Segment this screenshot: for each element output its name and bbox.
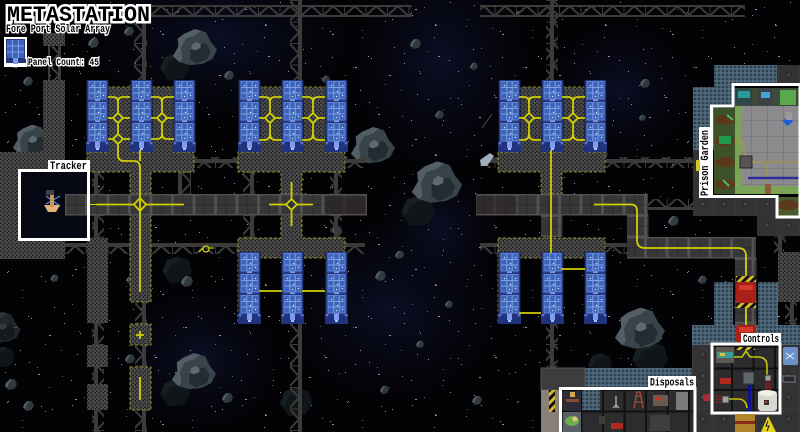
subtitle: Fore Port Solar Array <box>6 24 110 36</box>
door hazard on truss <box>696 160 700 171</box>
array 1 solar panels <box>86 80 196 152</box>
prison garden room <box>714 88 800 217</box>
prison garden frame <box>712 84 800 217</box>
wall signs and power crate <box>703 347 798 432</box>
panel count: Panel Count: 45 <box>28 57 99 69</box>
solar array mesh platforms <box>87 87 605 410</box>
disposals label <box>648 376 696 390</box>
controls label: Controls <box>743 334 779 346</box>
scorched floor tiles <box>325 196 517 214</box>
prison wing hull <box>693 65 800 236</box>
controls label <box>741 333 781 346</box>
array 2 lower solar panels <box>238 252 348 324</box>
array 2 upper solar panels <box>238 80 348 152</box>
controls room <box>713 345 779 412</box>
title: METASTATION <box>7 3 150 28</box>
lower right hull <box>692 345 800 432</box>
space debris: satellite <box>480 114 494 166</box>
icon: coiled cable on truss <box>199 246 214 252</box>
array 3 upper solar panels <box>498 80 607 152</box>
disposals frame <box>560 388 695 432</box>
icon: solar panel legend <box>4 37 27 67</box>
red airlock doors <box>736 276 756 343</box>
disposals label: Disposals <box>650 378 694 390</box>
asteroids <box>0 27 707 416</box>
yellow power cables <box>96 97 746 400</box>
prison garden label: Prison Garden <box>700 130 712 196</box>
lower right mesh walls <box>585 282 800 388</box>
floor strips <box>65 194 756 348</box>
engineering side rooms <box>541 368 585 432</box>
tracker frame <box>20 170 88 240</box>
tracker label: Tracker <box>50 161 87 173</box>
controls frame <box>712 344 780 413</box>
array 3 lower solar panels <box>498 252 607 324</box>
disposals room <box>562 390 693 432</box>
icon: solar tracker <box>44 190 60 212</box>
tracker room <box>20 171 96 239</box>
